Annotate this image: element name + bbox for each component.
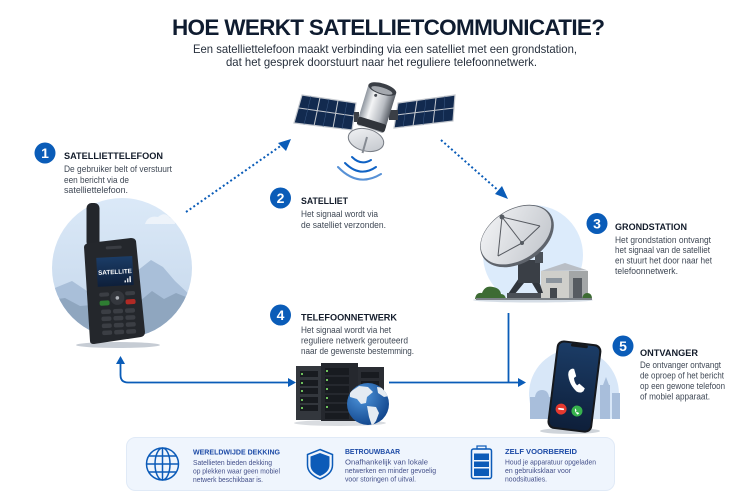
arrow: phone to satellite: [186, 139, 291, 212]
benefit: worldwide coverage: op plekken waar geen mobiel: [193, 466, 280, 476]
illustration: satellite phone in mountain circle: SATELLITE: [98, 268, 132, 277]
benefit: reliable: netwerken en minder gevoelig: [345, 466, 436, 475]
step 1: satellite phone text: satelliettelefoon.: [64, 185, 128, 195]
benefit: worldwide coverage: WERELDWIJDE DEKKING: [193, 448, 280, 456]
panel: benefits: [126, 438, 614, 490]
subtitle: dat het gesprek doorstuurt naar het reguliere telefoonnetwerk.: [226, 55, 537, 69]
step 2: satellite text: de satelliet verzonden.: [301, 220, 386, 230]
icon: battery: [472, 446, 492, 478]
benefit: self prepared: noodsituaties.: [505, 474, 547, 484]
step 5: receiver text: [612, 336, 725, 402]
step 4: phone network text: reguliere netwerk gerouteerd: [301, 336, 408, 346]
step 3: ground station text: Het grondstation ontvangt: [615, 235, 712, 245]
step 3: ground station text: GRONDSTATION: [615, 222, 687, 233]
right solar panel: [394, 95, 455, 128]
step 2: satellite text: Het signaal wordt via: [301, 209, 378, 219]
arrow: satellite to ground station: [441, 140, 508, 199]
step 3: ground station text: telefoonnetwerk.: [615, 266, 678, 276]
step 5: receiver text: 5: [619, 338, 627, 354]
illustration: satellite: [294, 80, 455, 180]
step 1: satellite phone text: De gebruiker belt of verstuurt: [64, 164, 173, 174]
benefit: reliable: Onafhankelijk van lokale: [345, 458, 428, 466]
step 3: ground station text: [586, 213, 713, 276]
illustration: ground station: [473, 204, 593, 302]
step 1: satellite phone text: 1: [41, 145, 49, 161]
step 2: satellite text: 2: [277, 190, 285, 206]
arrow: network to phone: [116, 356, 296, 387]
benefit: worldwide coverage: netwerk beschikbaar is.: [193, 475, 263, 484]
illustration: satellite phone in mountain circle: [50, 198, 196, 357]
icon: globe: [347, 383, 389, 426]
step 5: receiver text: ONTVANGER: [640, 348, 698, 359]
benefit: reliable: voor storingen of uitval.: [345, 474, 416, 484]
subtitle: [193, 42, 577, 69]
icon: decline button: [555, 403, 567, 415]
icon: signal waves: [338, 157, 381, 180]
icon: shield: [308, 450, 332, 479]
step 1: satellite phone text: SATELLIETTELEFOON: [64, 151, 163, 162]
benefit: reliable: BETROUWBAAR: [345, 447, 401, 456]
step 4: phone network text: Het signaal wordt via het: [301, 325, 392, 335]
illustration: servers and globe: [294, 363, 389, 426]
title: HOE WERKT SATELLIETCOMMUNICATIE?: [172, 15, 605, 40]
arrow: ground station to receiver: [389, 313, 526, 387]
step 1: satellite phone text: [34, 142, 173, 195]
illustration: receiver phone: [529, 340, 620, 439]
step 2: satellite text: [270, 188, 386, 230]
step 1: satellite phone text: een bericht via de: [64, 175, 129, 185]
step 3: ground station text: het signaal van de satelliet: [615, 245, 710, 255]
step 3: ground station text: en stuurt het door naar het: [615, 256, 713, 266]
icon: handset: [566, 368, 587, 393]
icon: globe outline: [146, 448, 178, 480]
step 3: ground station text: 3: [593, 216, 601, 232]
benefit: self prepared: en gebruiksklaar voor: [505, 466, 571, 475]
icon: accept button: [571, 405, 583, 417]
benefit: self prepared: [505, 447, 596, 484]
step 5: receiver text: de oproep of het bericht: [640, 370, 725, 380]
step 4: phone network text: 4: [277, 307, 285, 323]
step 5: receiver text: of mobiel apparaat.: [640, 392, 710, 402]
step 5: receiver text: op een gewone telefoon: [640, 381, 725, 391]
step 4: phone network text: TELEFOONNETWERK: [301, 312, 397, 324]
step 4: phone network text: [270, 304, 414, 356]
building: [541, 263, 588, 298]
step 5: receiver text: De ontvanger ontvangt: [640, 360, 721, 370]
subtitle: Een satelliettelefoon maakt verbinding via een satelliet met een grondstation,: [193, 42, 577, 56]
step 2: satellite text: SATELLIET: [301, 196, 348, 207]
benefit: self prepared: Houd je apparatuur opgeladen: [505, 458, 596, 466]
benefit: self prepared: ZELF VOORBEREID: [505, 447, 578, 456]
step 4: phone network text: naar de gewenste bestemming.: [301, 346, 414, 356]
benefit: worldwide coverage: [193, 448, 280, 484]
left solar panel: [294, 95, 356, 130]
benefit: reliable: [345, 447, 436, 484]
benefit: worldwide coverage: Satellieten bieden dekking: [193, 458, 272, 467]
